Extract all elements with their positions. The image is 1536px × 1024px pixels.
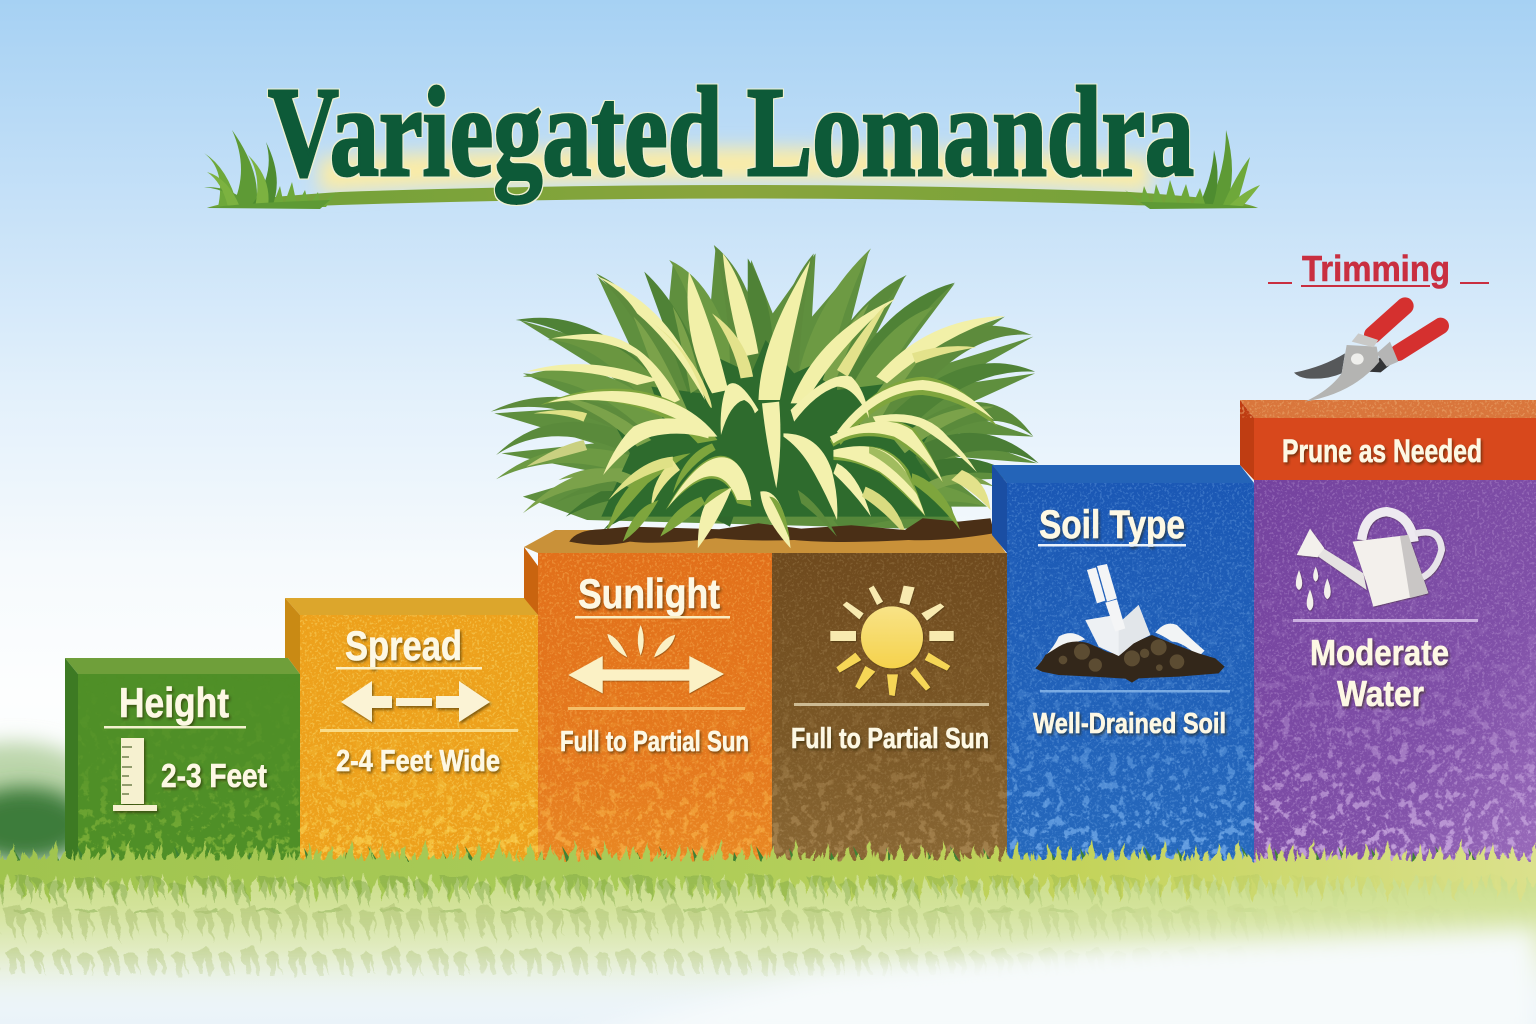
plant: [491, 245, 1039, 553]
soil top surface: [524, 530, 1006, 553]
block faces: [992, 465, 1254, 483]
block faces: [524, 547, 538, 615]
mid green leaves: [555, 303, 994, 493]
back foliage: [491, 245, 1039, 533]
icon: spread arrows: [341, 681, 490, 722]
icon: sun: [830, 586, 954, 696]
grass ground: [0, 864, 1536, 1010]
icon: ruler: [113, 738, 157, 811]
value: height: 2-3 Feet: [161, 757, 267, 794]
title text: Variegated Lomandra: [268, 61, 1194, 203]
central dark mass: [601, 340, 955, 517]
value: moderate water: [1310, 632, 1449, 714]
variegated leaves upper: [526, 253, 1005, 467]
icon: trowel in soil: [1035, 564, 1225, 683]
grass blades: [0, 874, 1256, 978]
heading: soil type: Soil Type: [1039, 503, 1185, 547]
foreground grass: [0, 830, 1536, 1024]
heading: height: Height: [119, 679, 229, 726]
lower leaves: [698, 488, 791, 548]
icon: watering can: [1296, 512, 1442, 611]
block faces: [65, 658, 300, 674]
soil mound: [1035, 635, 1225, 683]
spiky foliage silhouette: [494, 247, 1037, 530]
icon: pruners: [1294, 306, 1441, 402]
soil snow: [1045, 624, 1205, 658]
block: soil type: [992, 465, 1254, 872]
value: sunlight: Full to Partial Sun: [560, 726, 749, 758]
soil clods: [1059, 639, 1184, 672]
block: soil sun: [772, 553, 1007, 872]
block: trimming: [1240, 248, 1536, 480]
heading: sunlight: Sunlight: [578, 570, 720, 617]
block face: [1254, 480, 1536, 872]
block: spread: [285, 598, 538, 872]
grass band with toothed lower edge: [0, 858, 1536, 904]
brick faces: [1240, 400, 1536, 418]
title banner: [204, 61, 1260, 209]
heading: trimming: Trimming: [1302, 248, 1450, 289]
value: soil type: Well-Drained Soil: [1033, 708, 1226, 740]
trowel: [1085, 564, 1150, 656]
right grass tuft: [1125, 130, 1260, 209]
banner swoosh: [207, 185, 1258, 208]
icon: sun rays and arrow: [568, 625, 724, 693]
left grass tuft: [204, 130, 336, 209]
grass spiky edge: [0, 838, 1536, 863]
block: sunlight: [524, 547, 772, 872]
value: soil sun: Full to Partial Sun: [791, 723, 989, 755]
right side fade: [560, 930, 1536, 1024]
variegated leaves with green edge: [541, 377, 998, 533]
grass dark accents: [0, 842, 1536, 868]
leaf shading: [623, 443, 991, 542]
value: prune as needed: Prune as Needed: [1282, 433, 1482, 469]
leaves: [491, 245, 1039, 548]
block faces: [285, 598, 538, 615]
value: moderate water: Moderate: [1310, 632, 1449, 673]
block: height: [65, 658, 300, 872]
distant misty grass: [0, 742, 90, 863]
soil under leaves: [569, 518, 994, 545]
banner glow: [320, 148, 1150, 192]
value: spread: 2-4 Feet Wide: [336, 743, 500, 778]
heading: spread: Spread: [345, 622, 462, 669]
value: moderate water: Water: [1337, 673, 1424, 714]
block faces: [772, 553, 1007, 872]
block: watering: [1254, 480, 1536, 872]
